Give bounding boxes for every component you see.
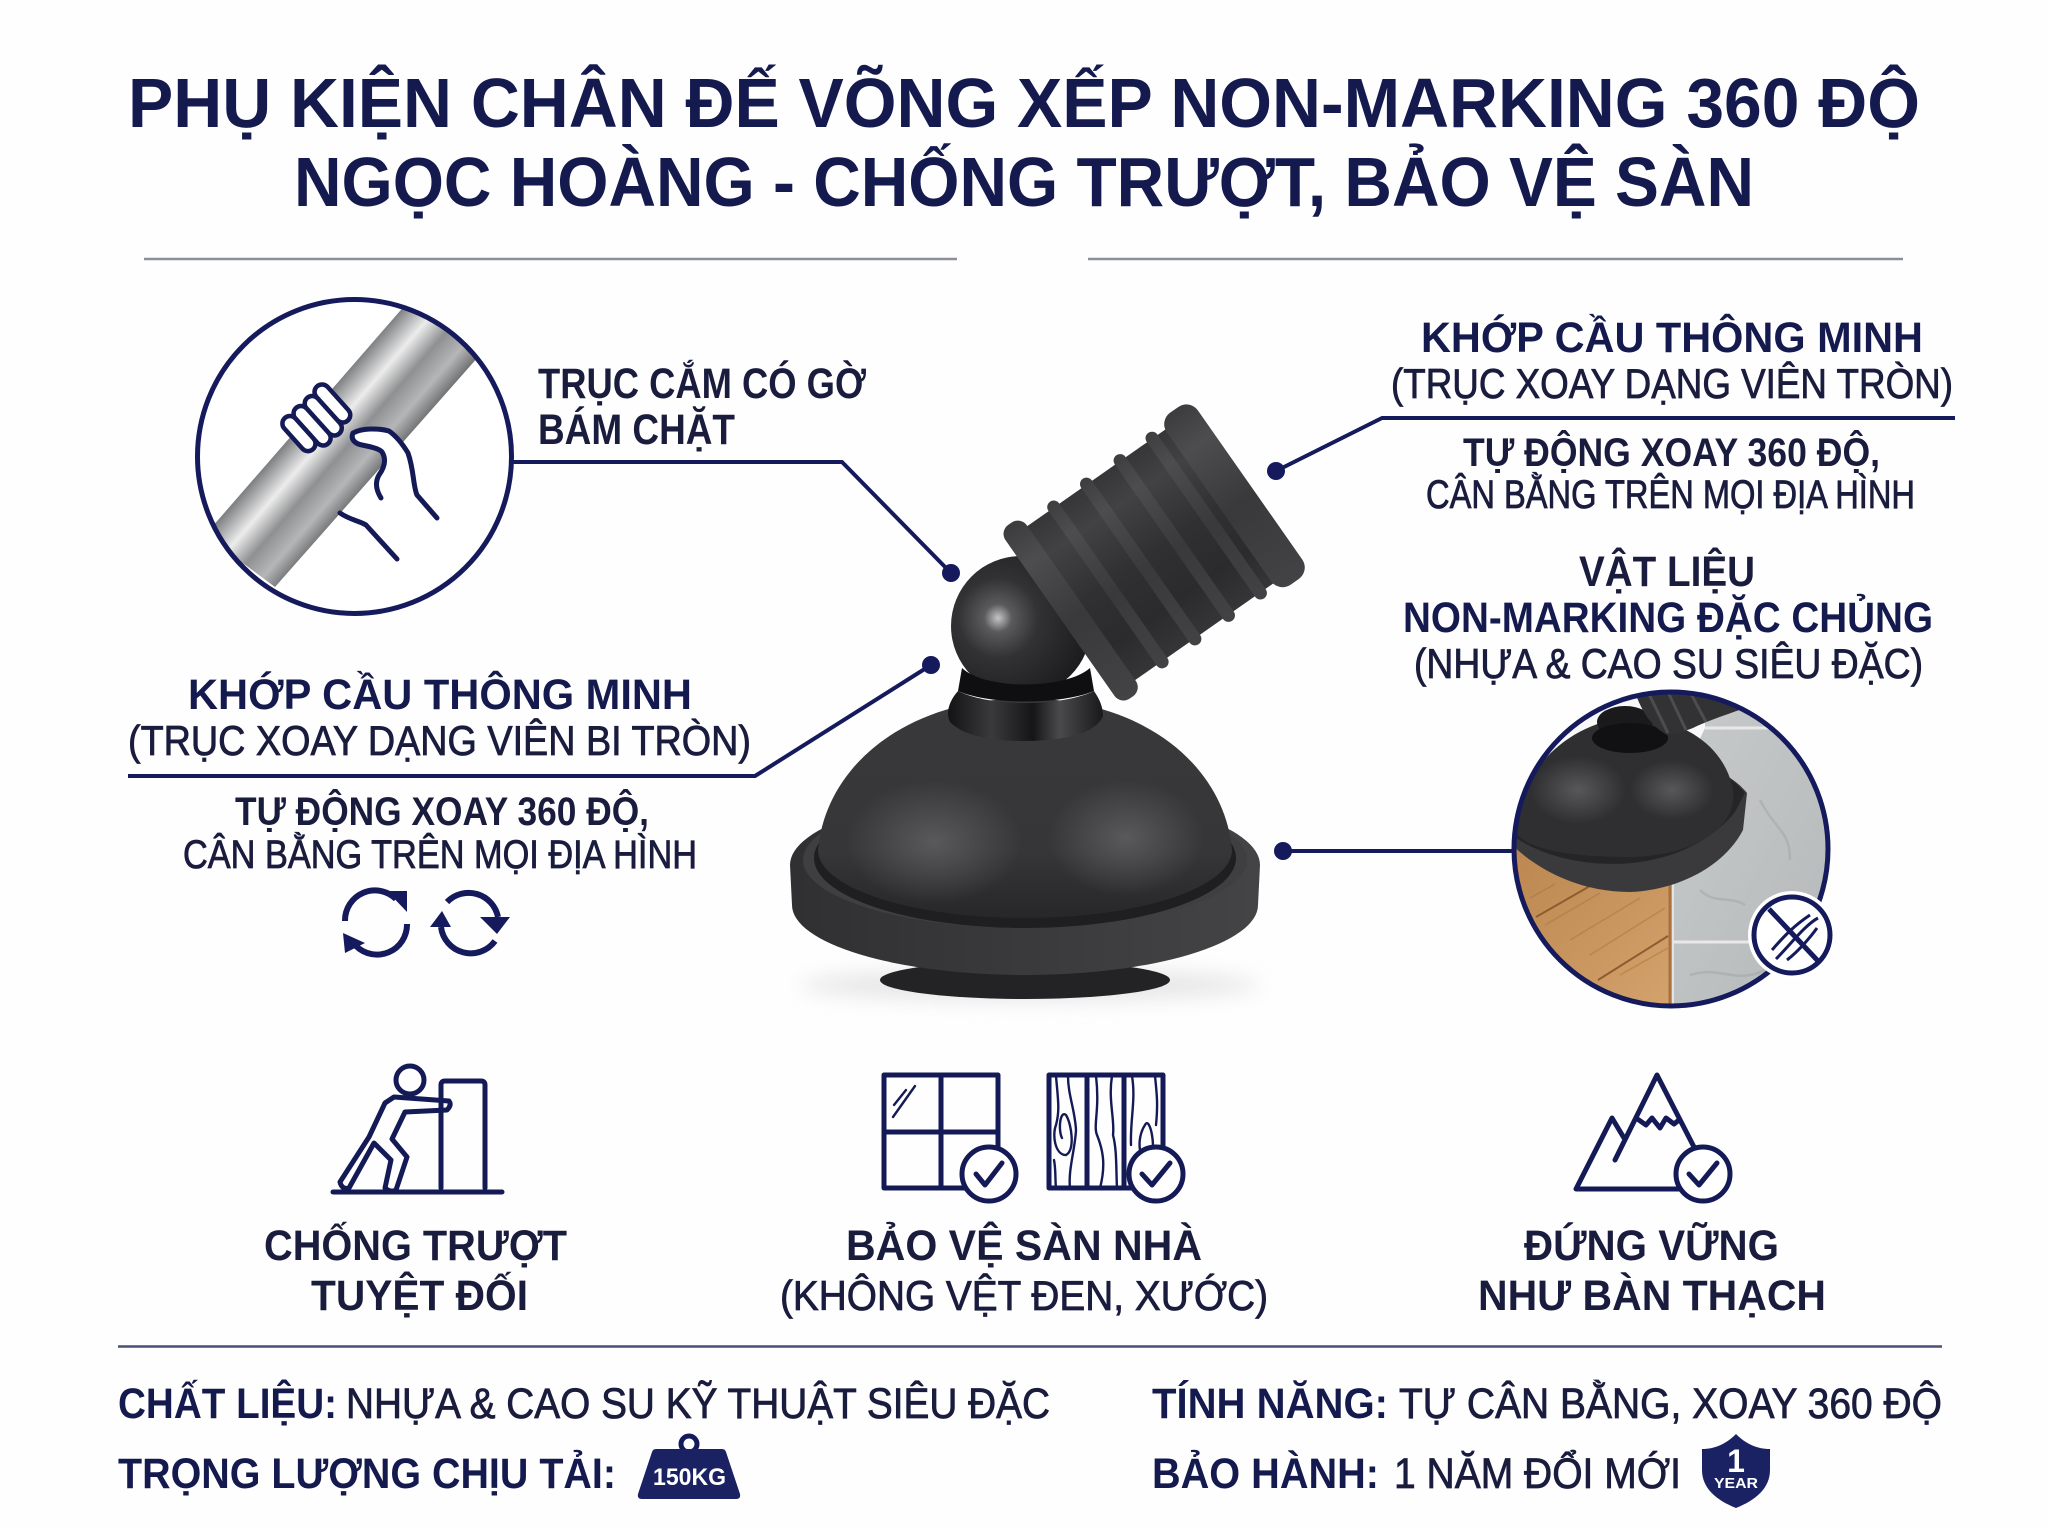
spec: features: TÍNH NĂNG:	[1152, 1380, 1388, 1428]
text: anti-slip label: CHỐNG TRƯỢT	[264, 1221, 567, 1270]
text: floor protection label	[780, 1221, 1268, 1319]
text: left ball joint label: KHỚP CẦU THÔNG MINH	[188, 670, 692, 719]
text: right ball joint label: (TRỤC XOAY DẠNG VIÊN TRÒN)	[1391, 360, 1953, 407]
spec: features	[1152, 1380, 1942, 1428]
spec: material	[118, 1379, 1050, 1428]
icon: 1 year shield: YEAR	[1714, 1475, 1758, 1492]
spec: load capacity: TRỌNG LƯỢNG CHỊU TẢI:	[118, 1449, 616, 1498]
text: material label: VẬT LIỆU	[1579, 547, 1755, 596]
text: left ball joint label: CÂN BẰNG TRÊN MỌI ĐỊA HÌNH	[183, 831, 697, 877]
spec: load capacity	[118, 1436, 740, 1499]
icon: 1 year shield: 1	[1727, 1443, 1745, 1479]
text: left ball joint label: (TRỤC XOAY DẠNG VIÊN BI TRÒN)	[128, 717, 751, 764]
icon: fingers wrapping shaft	[280, 382, 352, 454]
text: right ball joint label: CÂN BẰNG TRÊN MỌI ĐỊA HÌNH	[1426, 471, 1915, 517]
title: PHỤ KIỆN CHÂN ĐẾ VÕNG XẾP NON-MARKING 360 ĐỘ	[128, 63, 1920, 142]
text: anti-slip label	[264, 1221, 567, 1320]
icon: 150kg weight: 150KG	[653, 1464, 726, 1491]
icon: tile floor with check	[884, 1075, 1016, 1201]
spec: warranty: 1 NĂM ĐỔI MỚI	[1394, 1448, 1681, 1498]
panel: floor close-up magnifier	[1505, 690, 1836, 1010]
text: floor protection label: BẢO VỆ SÀN NHÀ	[846, 1221, 1202, 1270]
text: left ball joint label: TỰ ĐỘNG XOAY 360 ĐỘ,	[235, 788, 649, 834]
text: shaft grip label: TRỤC CẮM CÓ GỜ	[538, 359, 866, 408]
text: left ball joint label	[128, 670, 751, 877]
panel: gripping shaft magnifier	[198, 288, 512, 614]
feature: floor protection	[780, 1075, 1268, 1319]
spec: warranty	[1152, 1434, 1770, 1508]
spec: material: NHỰA & CAO SU KỸ THUẬT SIÊU ĐẶC	[346, 1380, 1050, 1428]
text: material label	[1403, 547, 1933, 687]
icon: person pushing block	[333, 1066, 502, 1192]
feature: stability	[1478, 1075, 1826, 1320]
spec: material: CHẤT LIỆU:	[118, 1379, 337, 1428]
spec: features: TỰ CÂN BẰNG, XOAY 360 ĐỘ	[1399, 1380, 1942, 1428]
text: stability label: NHƯ BÀN THẠCH	[1478, 1272, 1826, 1320]
text: right ball joint label: TỰ ĐỘNG XOAY 360 ĐỘ,	[1463, 429, 1880, 475]
text: right ball joint label: KHỚP CẦU THÔNG MINH	[1421, 313, 1923, 362]
text: shaft grip label: BÁM CHẶT	[538, 406, 735, 454]
icon: mountain with check	[1576, 1075, 1730, 1201]
text: stability label	[1478, 1221, 1826, 1320]
title	[128, 63, 1920, 221]
text: material label: (NHỰA & CAO SU SIÊU ĐẶC)	[1414, 640, 1923, 687]
icon: no scratches badge	[1748, 891, 1836, 979]
feature: anti-slip	[264, 1066, 567, 1320]
text: floor protection label: (KHÔNG VỆT ĐEN, XƯỚC)	[780, 1272, 1268, 1319]
text: shaft grip label	[538, 359, 866, 454]
icon: 150kg weight	[638, 1436, 740, 1499]
icon: 1 year shield	[1702, 1434, 1770, 1508]
text: stability label: ĐỨNG VỮNG	[1524, 1221, 1779, 1270]
text: material label: NON-MARKING ĐẶC CHỦNG	[1403, 593, 1933, 642]
title: NGỌC HOÀNG - CHỐNG TRƯỢT, BẢO VỆ SÀN	[294, 142, 1754, 221]
callout: right ball joint leader line	[1267, 418, 1955, 480]
text: right ball joint label	[1391, 313, 1953, 517]
callout: left ball joint leader line	[128, 656, 940, 776]
callout: material leader line	[1274, 842, 1514, 860]
spec: warranty: BẢO HÀNH:	[1152, 1449, 1379, 1498]
callout: shaft grip leader line	[513, 462, 960, 582]
icon: wood floor with check	[1049, 1075, 1183, 1201]
product photo: swivel foot	[790, 398, 1311, 1001]
icon: rotation arrows	[343, 890, 510, 955]
text: anti-slip label: TUYỆT ĐỐI	[311, 1271, 528, 1320]
